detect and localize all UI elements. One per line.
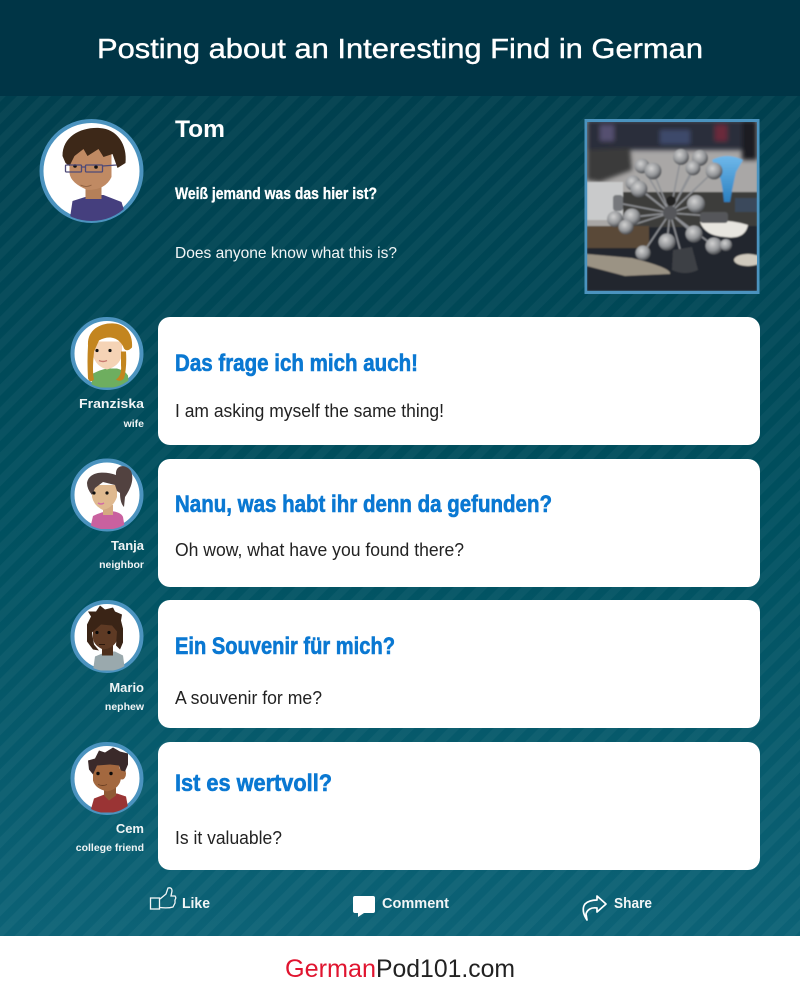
comment: Tanja: neighbor bbox=[99, 559, 144, 571]
photo: flea market find bbox=[584, 119, 762, 294]
avatar: Tanja bbox=[72, 460, 142, 530]
German comment: Das frage ich mich auch! bbox=[175, 350, 418, 377]
name and relation: Tanja: Tanja bbox=[111, 538, 145, 553]
avatar: Mario bbox=[72, 602, 142, 671]
name and relation: Franziska: Franziska bbox=[79, 396, 145, 411]
avatar: Cem bbox=[72, 744, 142, 813]
card: Mario bbox=[158, 600, 760, 728]
English comment: Is it valuable? bbox=[175, 828, 282, 848]
comment: Mario: nephew bbox=[105, 701, 145, 713]
icon: share arrow bbox=[583, 896, 606, 920]
icon: thumbs up bbox=[150, 888, 176, 909]
English post text: Does anyone know what this is? bbox=[175, 245, 397, 262]
label: Comment: Comment bbox=[382, 896, 449, 912]
action: Like bbox=[150, 888, 210, 912]
comment: Franziska: wife bbox=[123, 418, 144, 430]
logo: GermanPod101.com bbox=[285, 955, 515, 983]
action: Share bbox=[583, 896, 652, 920]
label: Like: Like bbox=[182, 896, 210, 912]
comment: Mario bbox=[72, 600, 760, 728]
English comment: I am asking myself the same thing! bbox=[175, 401, 444, 421]
name: Tom: Tom bbox=[175, 116, 225, 143]
comment: Cem bbox=[72, 742, 760, 870]
name and relation: Cem: Cem bbox=[116, 821, 144, 836]
German comment: Ist es wertvoll? bbox=[175, 770, 332, 797]
German comment: Nanu, was habt ihr denn da gefunden? bbox=[175, 491, 552, 518]
German comment: Ein Souvenir für mich? bbox=[175, 633, 395, 660]
action: Comment bbox=[353, 896, 449, 917]
German post text: Weiß jemand was das hier ist? bbox=[175, 185, 377, 203]
avatar: Franziska bbox=[72, 319, 142, 388]
card: Franziska bbox=[158, 317, 760, 445]
name and relation: Mario: Mario bbox=[109, 680, 144, 695]
English comment: A souvenir for me? bbox=[175, 688, 322, 708]
header bar bbox=[0, 0, 800, 96]
label: Share: Share bbox=[614, 896, 652, 912]
footer bbox=[0, 936, 800, 1000]
card: Tanja bbox=[158, 459, 760, 587]
avatar: Tom bbox=[42, 121, 142, 221]
post: Tom bbox=[42, 116, 762, 294]
logo: GermanPod101.com: German bbox=[285, 955, 376, 983]
icon: speech bubble bbox=[353, 896, 375, 917]
title: Posting about an Interesting Find in German bbox=[97, 33, 703, 64]
logo: GermanPod101.com: Pod101.com bbox=[376, 955, 515, 983]
comment: Cem: college friend bbox=[76, 842, 144, 854]
English comment: Oh wow, what have you found there? bbox=[175, 540, 464, 560]
comment: Franziska bbox=[72, 317, 760, 445]
comment: Tanja bbox=[72, 459, 760, 587]
card: Cem bbox=[158, 742, 760, 870]
